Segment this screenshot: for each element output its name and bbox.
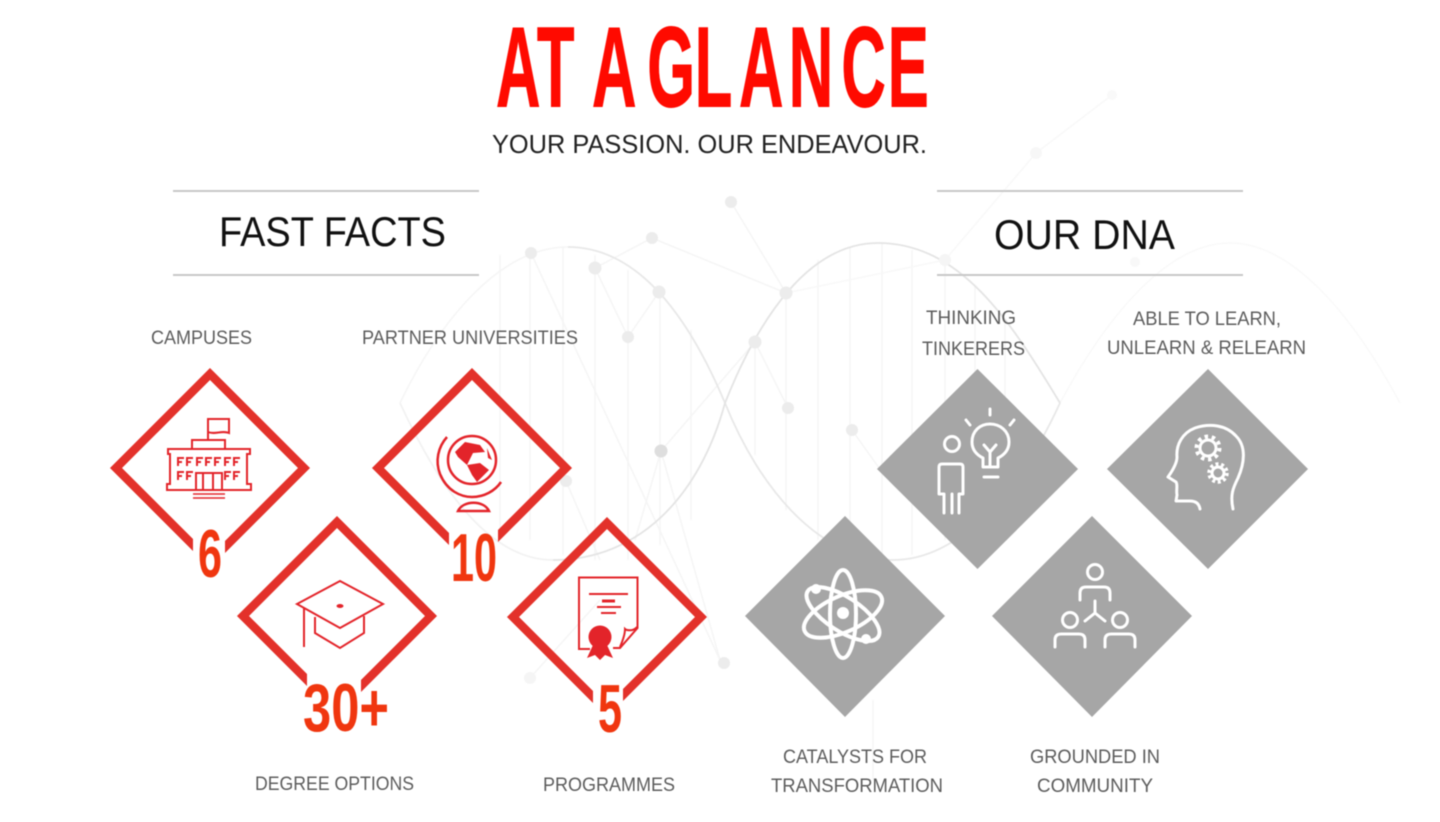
icon: atom — [797, 570, 889, 658]
label: thinking tinkerers: THINKING — [926, 308, 1016, 329]
icon: graduation cap — [297, 581, 383, 648]
label: thinking tinkerers — [922, 308, 1025, 360]
icon: person with light bulb — [939, 409, 1014, 513]
stat: campuses — [116, 374, 304, 592]
label: thinking tinkerers: TINKERERS — [922, 339, 1025, 360]
icon: certificate — [579, 578, 638, 660]
number: 5: 5 — [598, 671, 622, 747]
icon: campus building — [167, 419, 251, 498]
number: 10: 10 — [451, 520, 497, 596]
label: catalysts for transformation: CATALYSTS FOR — [783, 747, 927, 768]
label: able to learn: UNLEARN & RELEARN — [1107, 338, 1306, 359]
label: able to learn — [1107, 309, 1306, 359]
background DNA helix — [400, 90, 1400, 780]
card: catalysts for transformation — [745, 516, 945, 717]
heading: our dna: OUR DNA — [994, 211, 1175, 258]
number: 6: 6 — [198, 516, 222, 592]
heading: fast facts: FAST FACTS — [219, 208, 446, 255]
label: grounded in community: COMMUNITY — [1037, 776, 1153, 797]
label: grounded in community: GROUNDED IN — [1030, 747, 1160, 768]
label: grounded in community — [1030, 747, 1160, 797]
label: partner universities: PARTNER UNIVERSITIES — [362, 328, 578, 349]
icon: globe — [438, 436, 501, 511]
icon: head with gears — [1168, 425, 1243, 509]
panel: our dna — [745, 190, 1308, 797]
label: degree options: DEGREE OPTIONS — [255, 774, 414, 795]
label: campuses: CAMPUSES — [151, 328, 252, 349]
icon: community — [1055, 564, 1135, 647]
card: grounded in community — [992, 516, 1192, 717]
label: able to learn: ABLE TO LEARN, — [1133, 309, 1281, 330]
label: catalysts for transformation: TRANSFORMATION — [771, 776, 943, 797]
stat: degree options — [243, 522, 431, 746]
stat: programmes — [513, 523, 701, 747]
number: 30+: 30+ — [303, 670, 389, 746]
card: thinking tinkerers — [877, 369, 1078, 569]
title: AT A GLANCE — [496, 4, 929, 131]
label: programmes: PROGRAMMES — [543, 775, 675, 796]
subtitle: YOUR PASSION. OUR ENDEAVOUR. — [492, 129, 927, 159]
card: able to learn — [1107, 369, 1308, 569]
panel: fast facts — [116, 190, 701, 796]
stat: partner universities — [378, 374, 566, 596]
label: catalysts for transformation — [771, 747, 943, 797]
